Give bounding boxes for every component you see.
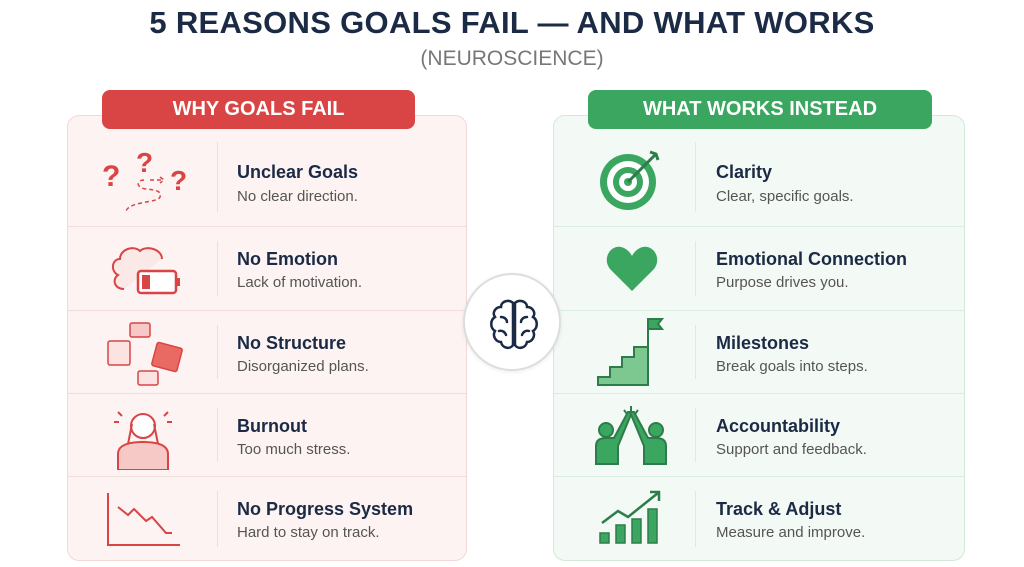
row: no structure: No Structure [237, 333, 346, 353]
row: burnout: Burnout [237, 416, 307, 436]
row: unclear goals: Unclear Goals [237, 162, 358, 182]
header: what works instead: WHAT WORKS INSTEAD [643, 98, 877, 120]
row: no structure: Disorganized plans. [237, 358, 369, 375]
row: clarity: Clarity [716, 162, 772, 182]
row: no emotion [68, 227, 466, 311]
icon: puzzle pieces [107, 322, 183, 386]
row: no structure [68, 311, 466, 394]
icon: stairs with flag [597, 318, 664, 386]
icon: target [600, 150, 660, 210]
icon: question marks: ? [102, 160, 120, 193]
panel: why goals fail [67, 115, 467, 561]
icon: heart [606, 246, 658, 291]
icon: brain battery [112, 247, 180, 294]
icon: stressed person [114, 411, 172, 470]
subtitle: (NEUROSCIENCE) [420, 47, 604, 70]
row: accountability [554, 394, 964, 477]
row: accountability: Accountability [716, 416, 840, 436]
title: 5 REASONS GOALS FAIL — AND WHAT WORKS [149, 5, 875, 40]
header: what works instead [588, 90, 932, 129]
row: milestones [554, 311, 964, 394]
row: emotional connection [554, 227, 964, 311]
row: unclear goals: No clear direction. [237, 188, 358, 205]
row: unclear goals [68, 128, 466, 227]
row: track & adjust: Track & Adjust [716, 499, 841, 519]
row: emotional connection: Emotional Connection [716, 249, 907, 269]
row: burnout: Too much stress. [237, 441, 350, 458]
row: accountability: Support and feedback. [716, 441, 867, 458]
icon: high five [595, 406, 667, 465]
row: no progress system [107, 491, 413, 547]
row: no progress system: Hard to stay on track. [237, 524, 380, 541]
row: no emotion: Lack of motivation. [237, 274, 362, 291]
icon: declining chart [107, 493, 180, 546]
row: clarity [554, 128, 964, 227]
row: clarity: Clear, specific goals. [716, 188, 854, 205]
row: milestones: Milestones [716, 333, 809, 353]
icon: question marks [102, 147, 187, 211]
row: track & adjust [599, 490, 865, 547]
row: emotional connection: Purpose drives you. [716, 274, 849, 291]
panel: what works instead [553, 115, 965, 561]
row: no emotion: No Emotion [237, 249, 338, 269]
icon: question marks: ? [136, 147, 153, 178]
icon: question marks: ? [170, 165, 187, 196]
row: milestones: Break goals into steps. [716, 358, 868, 375]
row: burnout [68, 394, 466, 477]
header: why goals fail [102, 90, 415, 129]
icon: growth chart [599, 490, 660, 544]
icon: center brain [463, 273, 561, 371]
row: no progress system: No Progress System [237, 499, 413, 519]
row: track & adjust: Measure and improve. [716, 524, 865, 541]
header: why goals fail: WHY GOALS FAIL [173, 98, 344, 120]
